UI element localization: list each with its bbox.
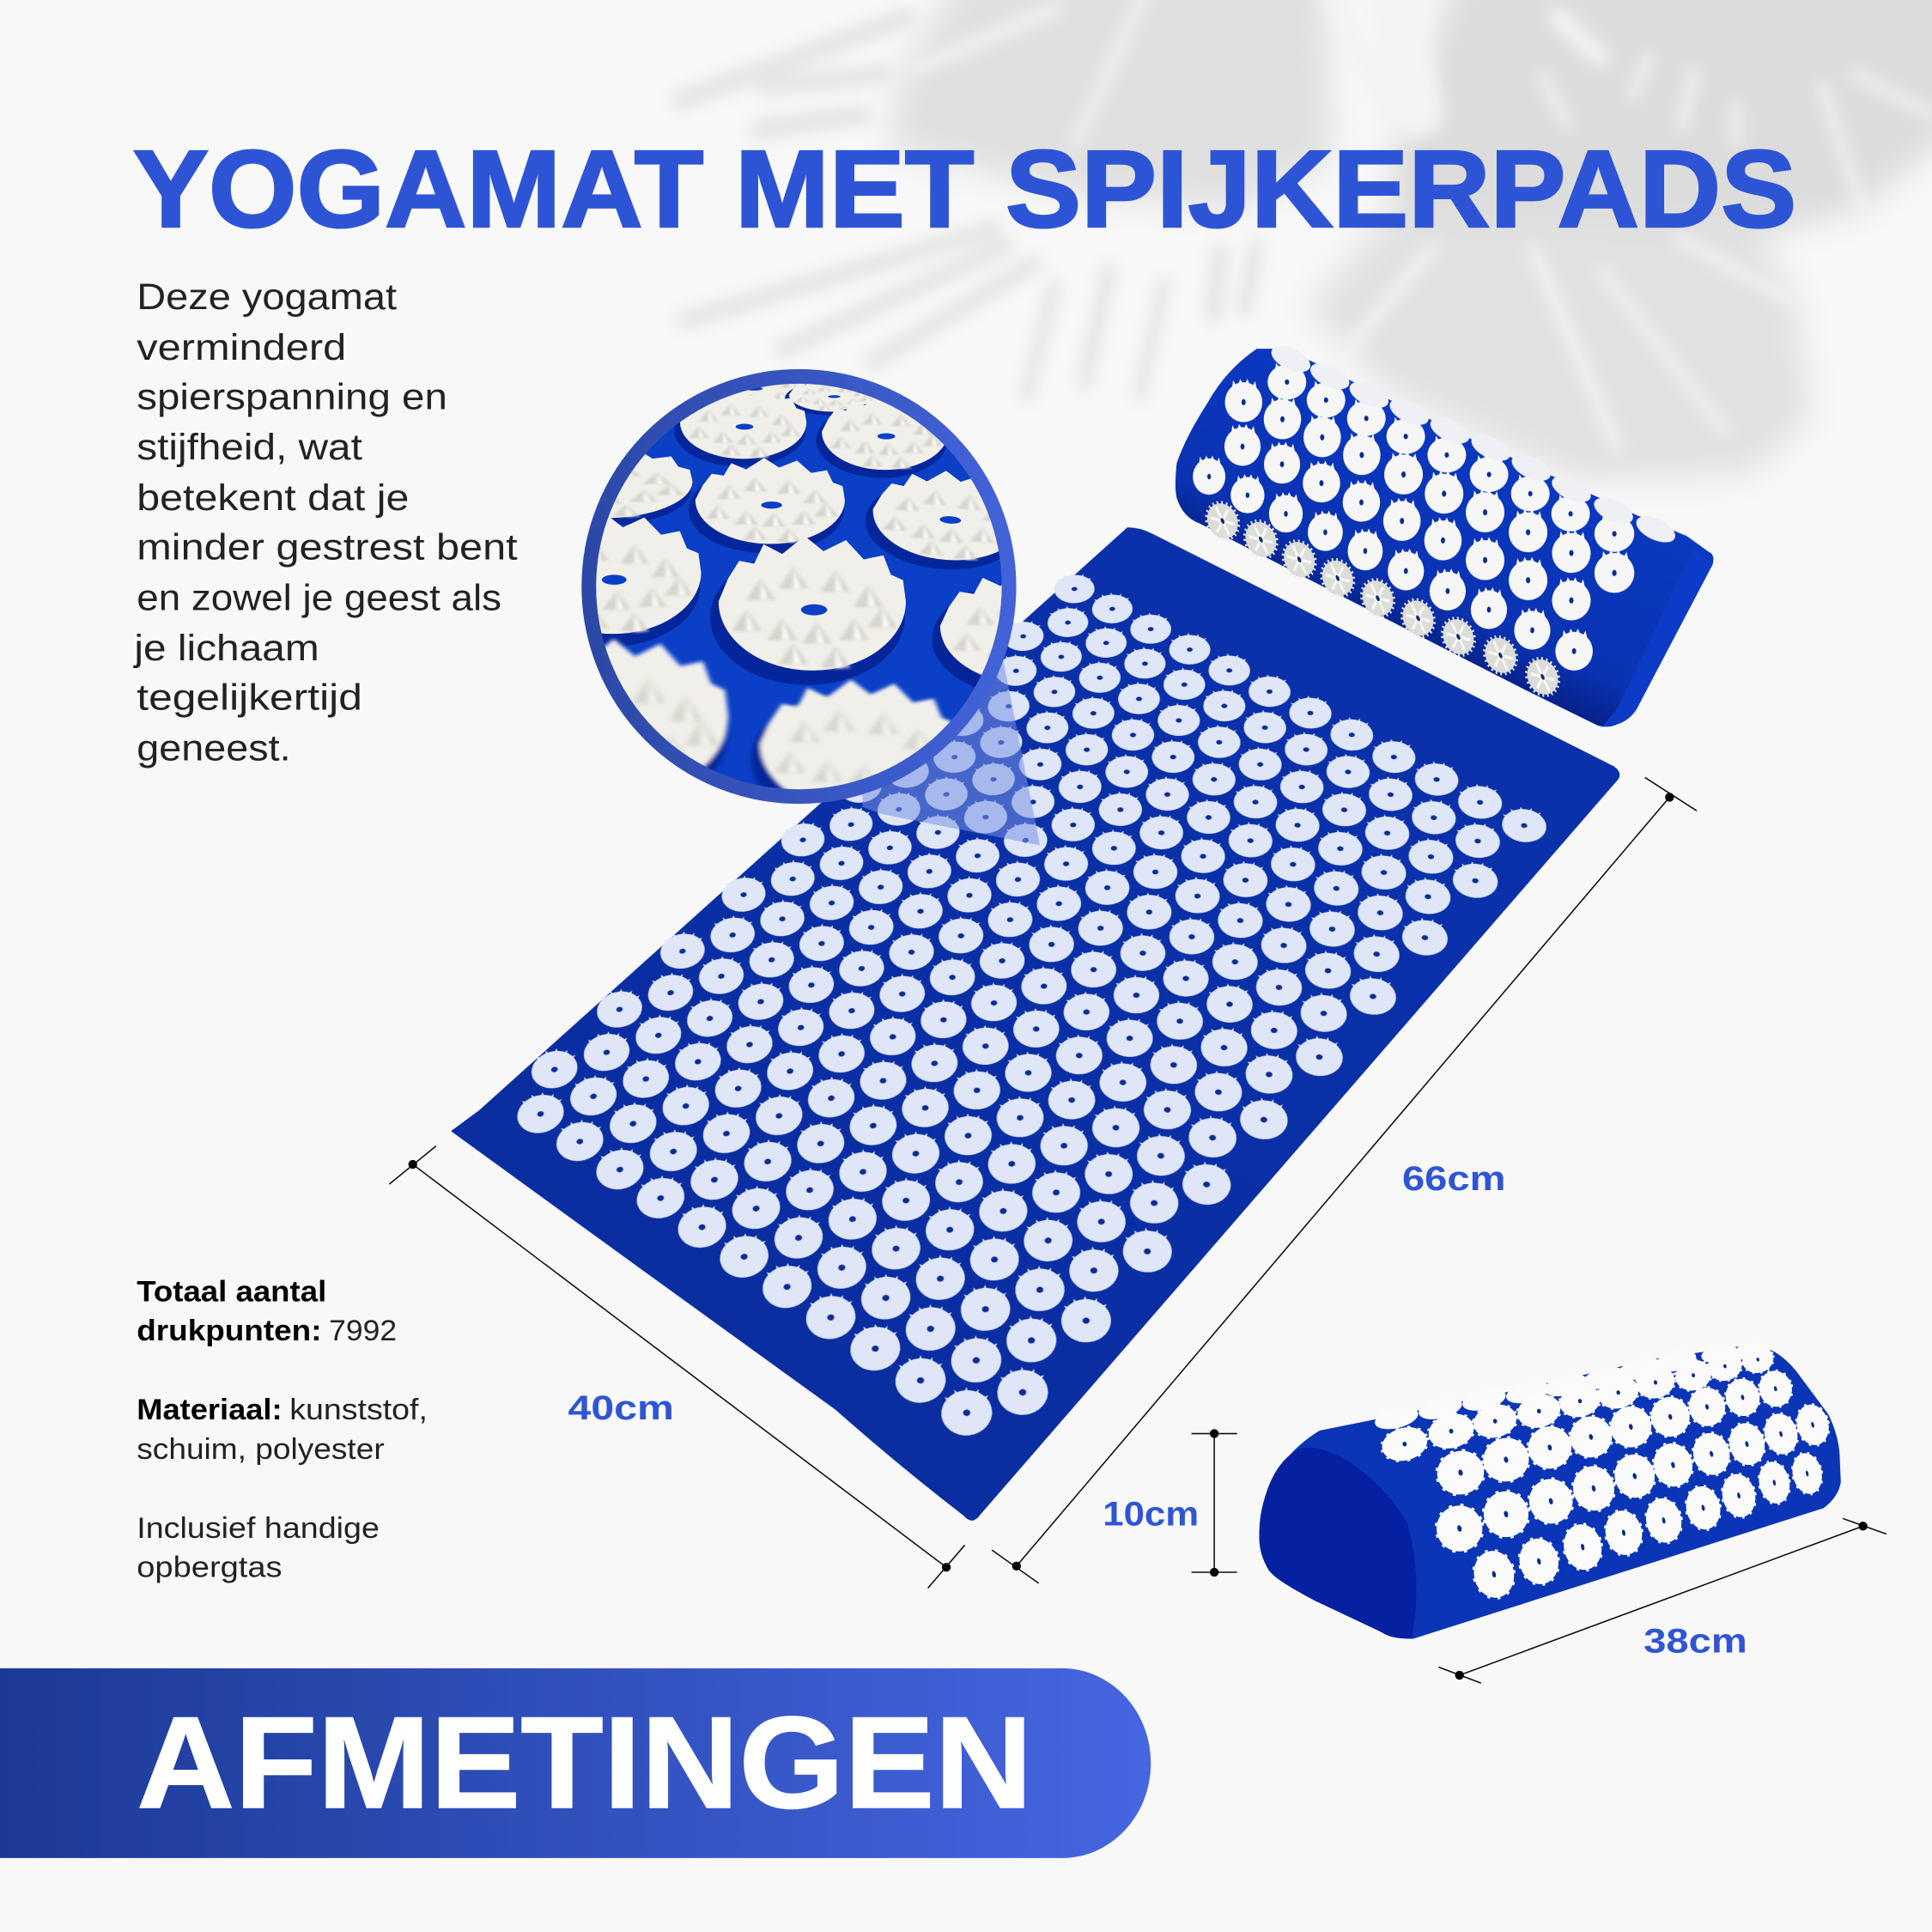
- spec: pressure points: 7992: [329, 1315, 397, 1347]
- dimension: 40cm: [389, 1146, 965, 1589]
- title: YOGAMAT MET SPIJKERPADS: [133, 128, 1796, 251]
- reflection wedge under magnifier: [862, 653, 1040, 845]
- dimension: 66cm: [992, 777, 1697, 1583]
- spec: pressure points: [137, 1275, 397, 1347]
- intro paragraph: geneest.: [137, 727, 291, 768]
- side pillow disc rows: [1377, 1342, 1833, 1602]
- palm leaf shadow: [682, 0, 1932, 481]
- pillow dark end face: [1260, 1448, 1416, 1638]
- spec: storage bag: Inclusief handige: [137, 1512, 380, 1545]
- dimension: 38cm: 38cm: [1643, 1621, 1747, 1660]
- spec: material: [137, 1394, 428, 1466]
- intro paragraph: [132, 276, 518, 768]
- light gaps between leaflets: [915, 0, 1932, 446]
- acupressure mat body: [451, 527, 1619, 1521]
- close-up background: [588, 376, 1010, 797]
- shadow masses: [887, 0, 1932, 481]
- spec: material: schuim, polyester: [137, 1433, 385, 1466]
- dimension: 40cm: 40cm: [568, 1388, 674, 1427]
- side pillow top frilled discs: [1373, 1340, 1771, 1433]
- side pillow with end cap: [1260, 1340, 1841, 1638]
- mat spike discs in perspective: [517, 574, 1547, 1436]
- pillow discs: main rows: [1193, 361, 1634, 671]
- spec: pressure points: drukpunten:: [137, 1315, 322, 1347]
- spec: storage bag: [137, 1512, 380, 1584]
- banner: afmetingen: AFMETINGEN: [137, 1690, 1032, 1836]
- intro paragraph: Deze yogamat: [137, 276, 397, 317]
- intro paragraph: verminderd: [137, 327, 346, 368]
- dimension: 38cm: [1438, 1518, 1886, 1683]
- pillow row: foreshortened top discs: [1267, 341, 1680, 548]
- spec: material: Materiaal:: [137, 1394, 283, 1426]
- intro paragraph: en zowel je geest als: [137, 577, 501, 617]
- intro paragraph: tegelijkertijd: [137, 677, 362, 718]
- magnifier: close-up of spike discs: [581, 369, 1017, 804]
- spec: storage bag: opbergtas: [137, 1552, 283, 1584]
- intro paragraph: betekent dat je: [137, 477, 409, 518]
- intro paragraph: stijfheid, wat: [137, 427, 362, 467]
- shadow leaflets: [682, 17, 1257, 394]
- pillow row: shaded spiky discs: [1200, 497, 1565, 701]
- intro paragraph: minder gestrest bent: [137, 526, 518, 567]
- dimension: 10cm: 10cm: [1103, 1494, 1199, 1533]
- spec: pressure points: Totaal aantal: [137, 1275, 326, 1308]
- dimension: 66cm: 66cm: [1402, 1159, 1506, 1198]
- spec: material: kunststof,: [289, 1394, 428, 1426]
- product specifications: [137, 1275, 428, 1584]
- dimension: 10cm: [1103, 1429, 1237, 1577]
- banner: afmetingen: [0, 1668, 1151, 1858]
- intro paragraph: je lichaam: [132, 628, 319, 668]
- pillow seen from above: [1176, 341, 1713, 727]
- close-up discs: [596, 383, 1002, 790]
- intro paragraph: spierspanning en: [137, 376, 447, 416]
- magnifier ring: [589, 376, 1009, 797]
